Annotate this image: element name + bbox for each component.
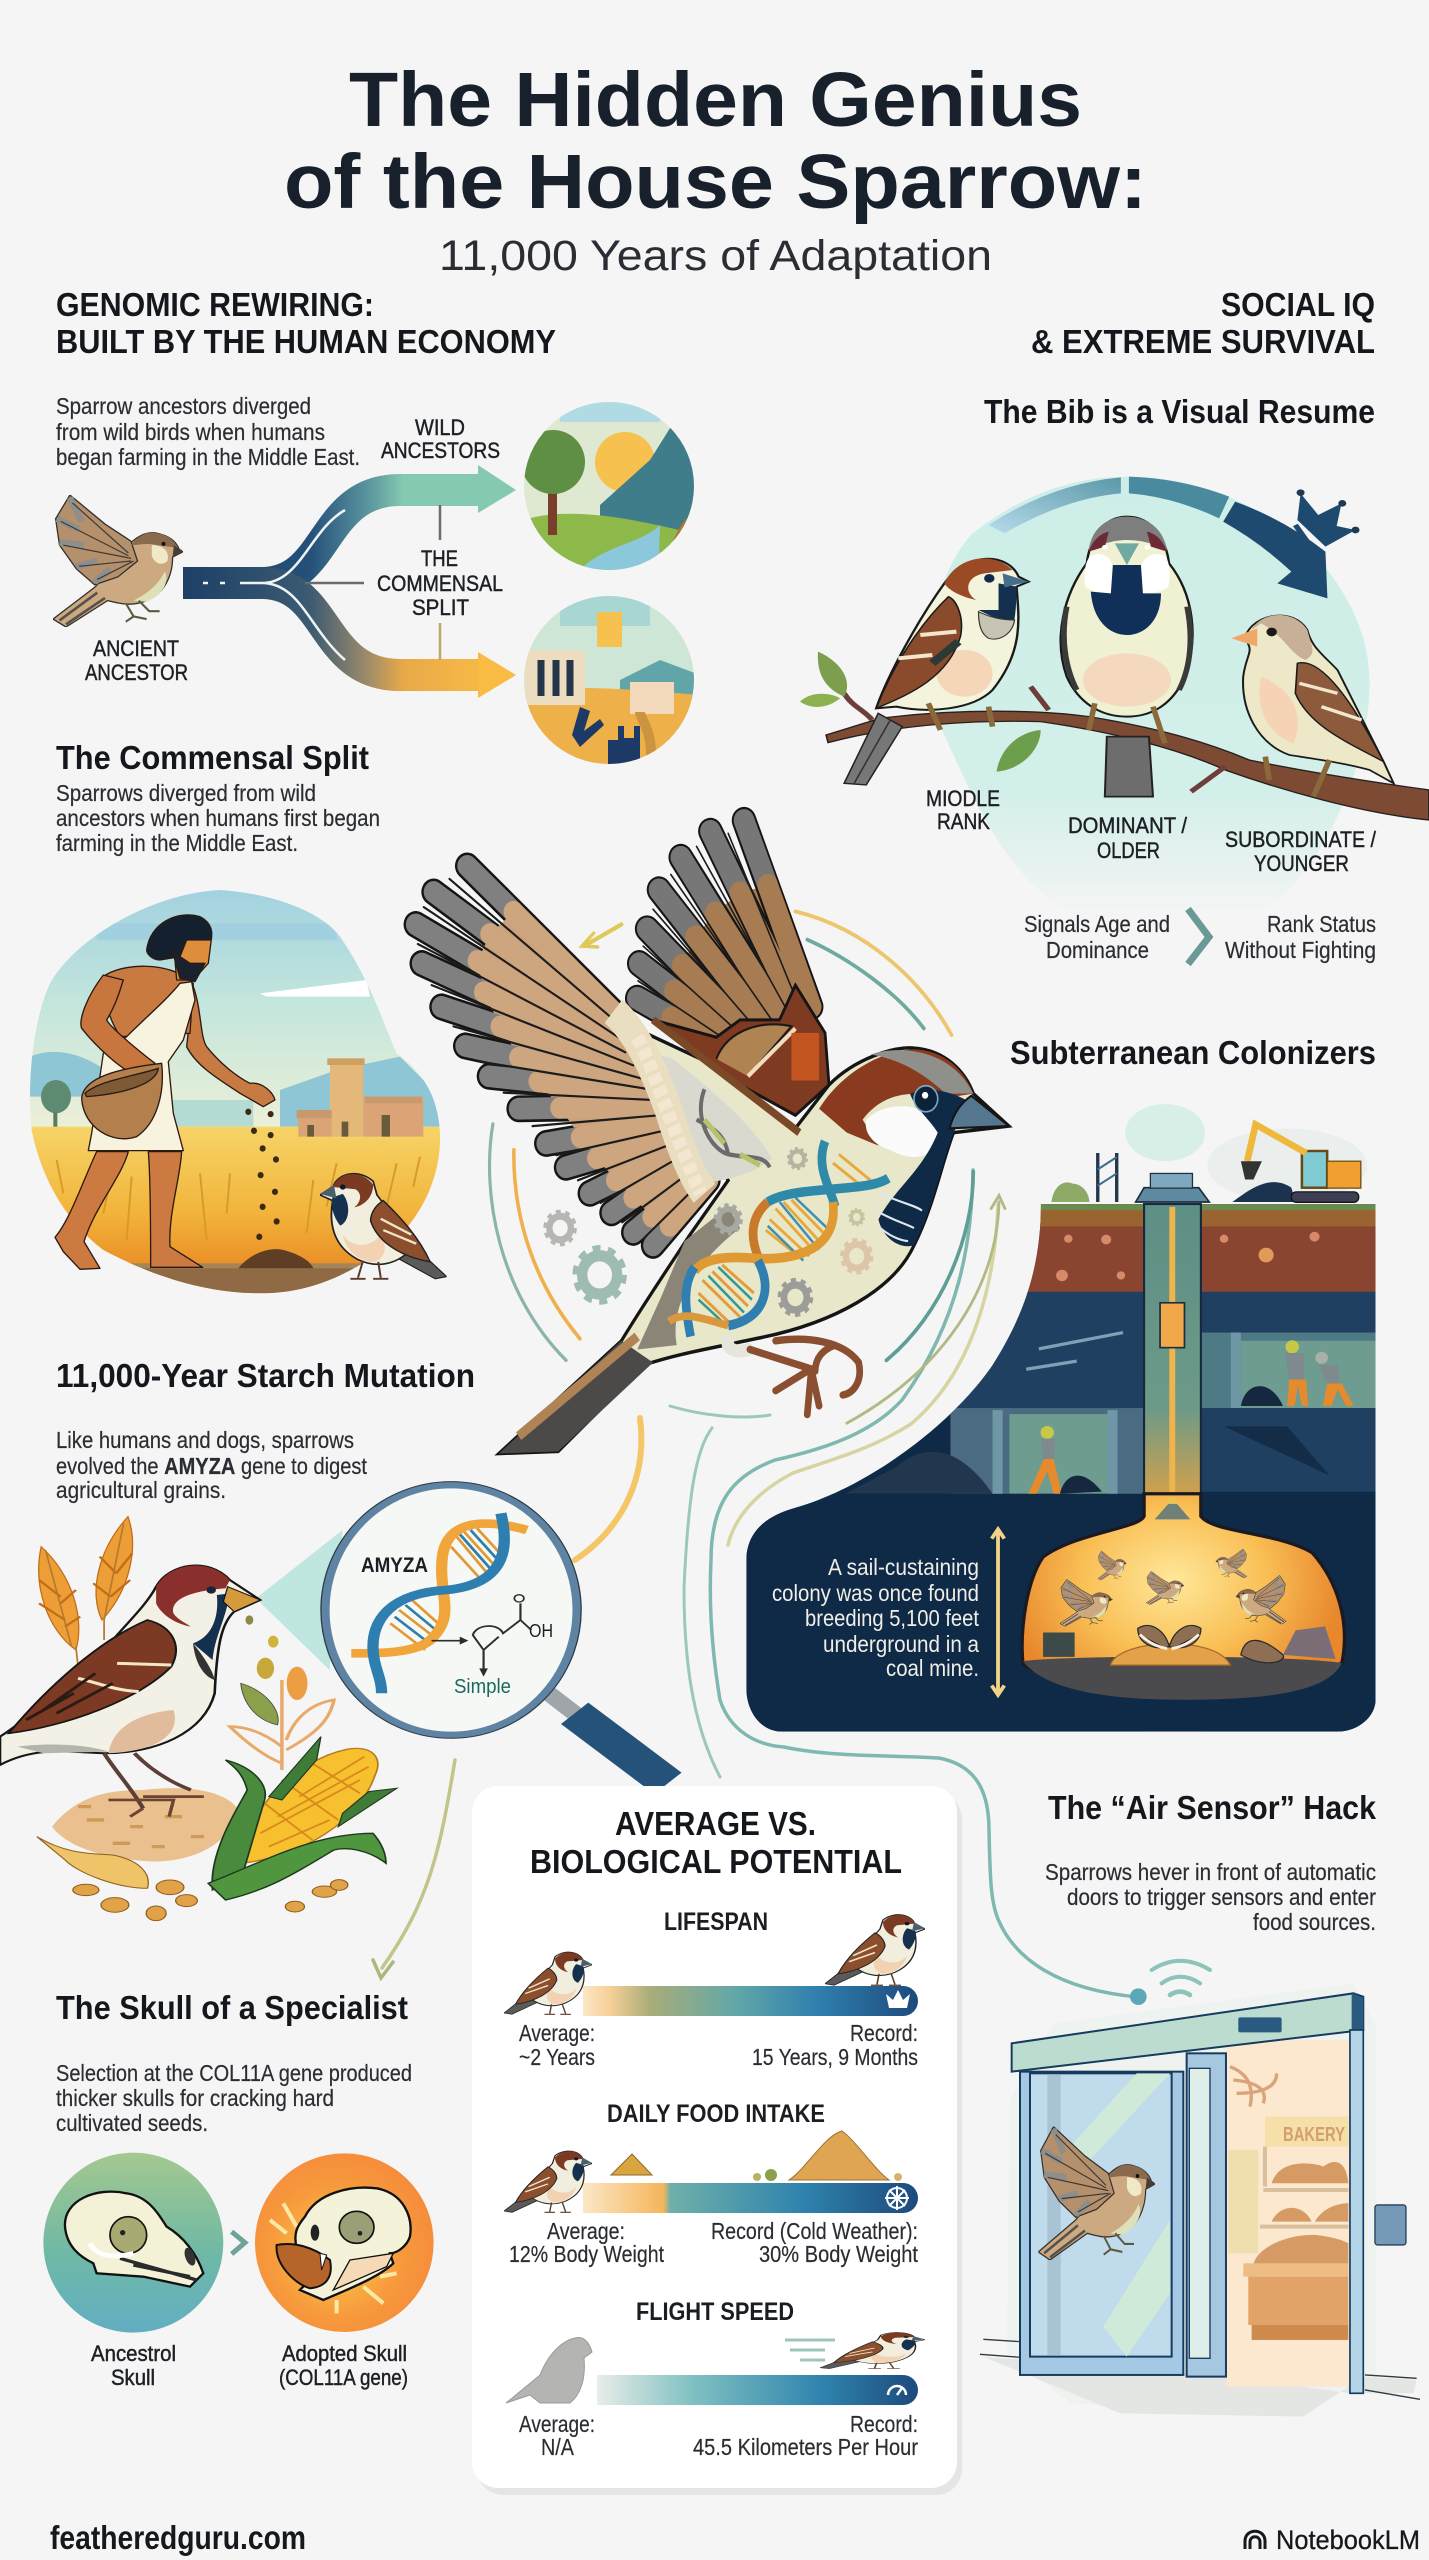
section heading: social iq: SOCIAL IQ — [1221, 286, 1375, 323]
text: commensal split: farming in the Middle East. — [56, 830, 298, 856]
mine text: underground in a — [823, 1631, 979, 1657]
coverts — [653, 985, 829, 1115]
legs and feet — [728, 1339, 860, 1415]
motion arcs and gears — [490, 911, 1005, 1423]
labels: rank names: OLDER — [1097, 838, 1160, 863]
card heading: BIOLOGICAL POTENTIAL — [530, 1843, 902, 1880]
nest and colony birds — [1043, 1549, 1336, 1665]
magnifier labels: Simple — [454, 1676, 511, 1698]
mine text — [772, 1554, 980, 1681]
intro text: Sparrow ancestors diverged — [56, 393, 311, 419]
flight speed row: 45.5 Kilometers Per Hour — [693, 2434, 918, 2460]
left wing — [416, 866, 708, 1245]
text: skull of a specialist — [56, 2060, 412, 2136]
mine text: coal mine. — [886, 1655, 979, 1681]
text: starch mutation: agricultural grains. — [56, 1477, 226, 1503]
tree and building — [41, 1058, 423, 1137]
text: starch mutation: Like humans and dogs, sparrows — [56, 1427, 354, 1453]
heading: starch mutation: 11,000-Year Starch Mutation — [56, 1357, 475, 1394]
skull comparison — [43, 2153, 434, 2333]
central sparrow with DNA — [416, 820, 1009, 1454]
card heading: AVERAGE VS. — [615, 1805, 816, 1842]
heading: air sensor hack: The “Air Sensor” Hack — [1048, 1789, 1377, 1826]
mine text: A sail-custaining — [828, 1554, 979, 1580]
label: ancient ancestor: ANCESTOR — [85, 660, 188, 685]
footer: website: featheredguru.com — [50, 2519, 306, 2556]
text: commensal split: ancestors when humans first began — [56, 805, 380, 831]
lifespan row: Average: — [519, 2020, 595, 2046]
chevron — [232, 2232, 245, 2254]
flight speed row: N/A — [541, 2434, 575, 2460]
daily food intake row: 12% Body Weight — [509, 2241, 665, 2267]
section heading: social iq: & EXTREME SURVIVAL — [1031, 323, 1375, 360]
magnifier labels: OH — [529, 1621, 553, 1641]
text: starch mutation — [56, 1427, 368, 1503]
sparrow on the ground — [320, 1174, 447, 1279]
lifespan row: ~2 Years — [519, 2044, 595, 2070]
labels: rank names: DOMINANT / — [1068, 813, 1188, 838]
mine shaft — [1144, 1204, 1201, 1518]
depth arrow — [992, 1529, 1004, 1695]
card heading — [530, 1805, 902, 1880]
skull captions: (COL11A gene) — [279, 2365, 408, 2390]
title — [284, 57, 1147, 225]
illustration: ancient farmer sowing seed — [20, 880, 460, 1300]
lifespan row — [504, 1908, 925, 2070]
lifespan row: Record: — [850, 2020, 918, 2046]
skull captions — [91, 2341, 408, 2390]
section heading: genomic rewiring: GENOMIC REWIRING: — [56, 286, 374, 323]
daily food intake row — [504, 2100, 919, 2267]
wild landscape circle — [520, 400, 700, 575]
text: commensal split: Sparrows diverged from wild — [56, 780, 316, 806]
wall button — [1375, 2205, 1406, 2245]
heading: the bib is a visual resume: The Bib is a Visual Resume — [984, 393, 1375, 430]
daily food intake row: Average: — [547, 2218, 625, 2244]
label: the commensal split: COMMENSAL — [377, 571, 503, 596]
soil mound — [238, 1249, 313, 1268]
flight speed row — [506, 2298, 925, 2460]
daily food intake row: Record (Cold Weather): — [711, 2218, 918, 2244]
illustration: three sparrows on a branch — [800, 477, 1429, 917]
skull captions: Ancestrol — [91, 2341, 176, 2366]
branch — [800, 652, 1429, 820]
daily food intake row: 30% Body Weight — [759, 2241, 919, 2267]
wheat stalks — [39, 1517, 132, 1667]
flight speed row: FLIGHT SPEED — [636, 2298, 794, 2326]
label: the commensal split: THE — [421, 546, 458, 571]
text: skull of a specialist: thicker skulls for cracking hard — [56, 2085, 334, 2111]
sensor dot and wifi waves — [1130, 1961, 1210, 2005]
door sparrow — [1038, 2127, 1155, 2260]
text: commensal split — [56, 780, 380, 856]
label: ancient ancestor — [85, 636, 188, 685]
label: wild ancestors: WILD — [415, 415, 465, 440]
section heading: genomic rewiring: BUILT BY THE HUMAN ECONOMY — [56, 323, 556, 360]
ancestral skull — [43, 2153, 223, 2333]
dna double helix — [669, 1089, 888, 1336]
icon: ancient ancestor bird — [53, 495, 183, 627]
bib signal summary: Without Fighting — [1225, 937, 1376, 963]
panel: average vs biological potential — [472, 1786, 962, 2495]
bakery sign text: BAKERY — [1283, 2124, 1345, 2146]
starch sparrow — [0, 1565, 260, 1817]
labels: rank names: YOUNGER — [1254, 851, 1349, 876]
miners — [1028, 1340, 1354, 1494]
grain mound — [52, 1788, 239, 1862]
rank arrow — [989, 477, 1327, 598]
title: The Hidden Genius — [349, 57, 1082, 143]
text: starch mutation: evolved the AMYZA gene to digest — [56, 1453, 368, 1479]
bib signal summary: Signals Age and — [1024, 911, 1170, 937]
farmer — [55, 915, 275, 1269]
cavern floor — [1023, 1657, 1342, 1700]
falling seeds — [248, 1112, 277, 1237]
icon: crown — [1295, 489, 1360, 556]
title: of the House Sparrow: — [284, 139, 1147, 225]
pale backdrop and floor shadow — [1007, 1983, 1377, 2417]
diagram: commensal split — [53, 400, 700, 770]
mine text: colony was once found — [772, 1580, 979, 1606]
text: skull of a specialist: cultivated seeds. — [56, 2110, 208, 2136]
magnifier labels — [361, 1554, 553, 1698]
bib signal summary: Dominance — [1046, 937, 1149, 963]
text: air sensor hack — [1045, 1859, 1376, 1935]
bib signal summary: Rank Status — [1267, 911, 1376, 937]
excavator — [1241, 1124, 1361, 1202]
heading: the commensal split: The Commensal Split — [56, 739, 369, 776]
support beams — [998, 1333, 1236, 1494]
sliding glass door — [1020, 2053, 1226, 2377]
teal zoom cone — [256, 1530, 343, 1670]
gears inside body — [780, 1280, 811, 1314]
section heading: genomic rewiring — [56, 286, 556, 360]
upper wing — [637, 820, 811, 1055]
flight speed row: Record: — [850, 2411, 918, 2437]
intro text — [56, 393, 360, 470]
text: air sensor hack: food sources. — [1253, 1909, 1376, 1935]
door header — [1012, 1993, 1363, 2393]
glowing cavern — [1022, 1494, 1344, 1681]
subtitle: 11,000 Years of Adaptation — [439, 232, 992, 280]
adapted skull — [255, 2153, 434, 2332]
lifespan row: LIFESPAN — [664, 1908, 768, 1936]
intro text: began farming in the Middle East. — [56, 444, 360, 470]
label: ancient ancestor: ANCIENT — [93, 636, 179, 661]
labels: rank names: RANK — [937, 809, 990, 834]
mine text: breeding 5,100 feet — [805, 1605, 980, 1631]
label: the commensal split: SPLIT — [412, 595, 469, 620]
field scene — [30, 890, 440, 1294]
bird: subordinate — [1231, 615, 1394, 797]
illustration: sparrow, grains and magnifier — [0, 1482, 668, 1921]
lamp — [1155, 1498, 1190, 1519]
flight speed row: Average: — [519, 2411, 595, 2437]
skull captions: Adopted Skull — [282, 2341, 407, 2366]
surface scene — [1051, 1104, 1367, 1202]
magnifier handle — [549, 1693, 668, 1783]
bib signal summary — [1024, 909, 1376, 964]
lifespan row: 15 Years, 9 Months — [752, 2044, 918, 2070]
corn cob — [208, 1737, 397, 1900]
magnifier lens — [321, 1482, 581, 1738]
intro text: from wild birds when humans — [56, 419, 325, 445]
flow curves around the bird — [373, 1170, 1138, 1997]
illustration: automatic door and bakery — [980, 1961, 1420, 2417]
footer: notebooklm logo: NotebookLM — [1276, 2525, 1420, 2555]
upper road to wild ancestors — [183, 465, 516, 583]
head and face — [819, 1049, 1009, 1246]
text: air sensor hack: Sparrows hever in front of automatic — [1045, 1859, 1376, 1885]
rock strata — [740, 1204, 1413, 1734]
falling grains and sprout — [230, 1615, 334, 1770]
text: air sensor hack: doors to trigger sensors and enter — [1067, 1884, 1376, 1910]
bakery interior — [1227, 2040, 1352, 2387]
label: wild ancestors — [381, 415, 500, 463]
labels: rank names: SUBORDINATE / — [1225, 827, 1377, 852]
heading: skull of a specialist: The Skull of a Specialist — [56, 1989, 408, 2026]
labels: rank names: MIODLE — [926, 786, 1000, 811]
skull captions: Skull — [111, 2365, 155, 2390]
lower road to farming — [183, 583, 516, 698]
labels: rank names — [926, 786, 1377, 876]
section heading: social iq — [1031, 286, 1375, 360]
panel: coal mine cross-section — [740, 1104, 1413, 1734]
scapular feathers — [614, 1011, 704, 1193]
loose grains — [37, 1837, 348, 1921]
heading: subterranean colonizers: Subterranean Colonizers — [1010, 1034, 1376, 1071]
farm landscape circle — [524, 596, 694, 764]
body — [499, 1033, 1009, 1454]
bird: dominant — [1061, 517, 1193, 797]
magnifier labels: AMYZA — [361, 1554, 428, 1577]
label: the commensal split — [377, 546, 503, 620]
daily food intake row: DAILY FOOD INTAKE — [607, 2100, 825, 2128]
bird: middle rank — [844, 558, 1029, 785]
label: wild ancestors: ANCESTORS — [381, 438, 500, 463]
text: skull of a specialist: Selection at the COL11A gene produced — [56, 2060, 412, 2086]
